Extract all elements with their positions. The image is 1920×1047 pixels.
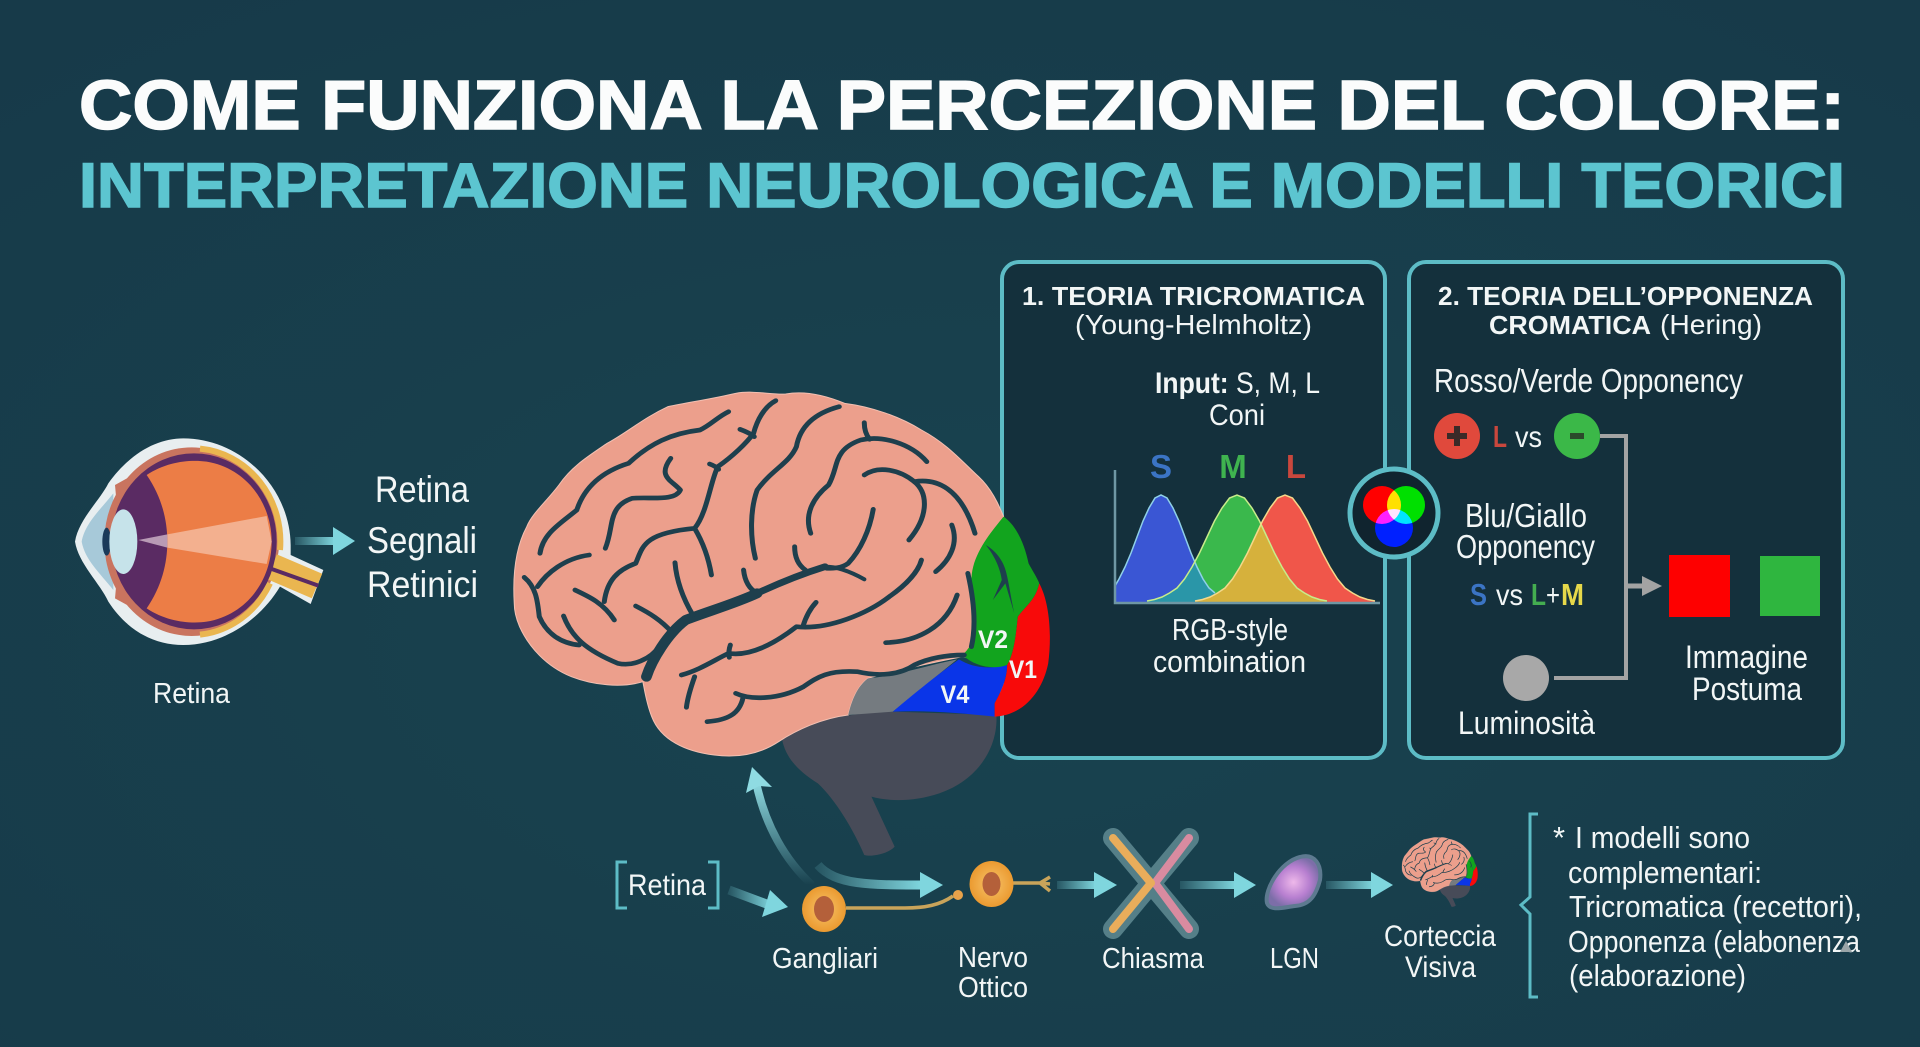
icon: optic nerve cell — [970, 861, 1050, 907]
RGB-style caption: RGB-style — [1172, 612, 1288, 647]
label V1: V1 — [1009, 656, 1037, 684]
S vs L+M: L — [1531, 577, 1546, 612]
RGB-style caption: combination — [1153, 644, 1306, 679]
panel heading: 1. TEORIA TRICROMATICA — [1022, 281, 1365, 311]
blu/giallo label — [1456, 497, 1595, 565]
label corteccia visiva: Corteccia — [1384, 920, 1496, 953]
blu/giallo label: Opponency — [1456, 528, 1595, 565]
S vs L+M: M — [1561, 577, 1584, 612]
label corteccia visiva: Visiva — [1405, 951, 1476, 984]
label M: M — [1219, 448, 1247, 485]
panel subtitle: (Young-Helmholtz) — [1075, 309, 1312, 340]
pathway labels — [772, 920, 1496, 1004]
green afterimage square — [1760, 556, 1820, 616]
panel: opponenza cromatica — [1409, 262, 1843, 758]
label LGN: LGN — [1270, 943, 1319, 975]
immagine postuma label — [1685, 639, 1808, 707]
rosso/verde label: Rosso/Verde Opponency — [1434, 362, 1743, 399]
panel heading line 2: (Hering) — [1660, 309, 1762, 340]
label nervo ottico — [958, 942, 1028, 1004]
panel frame — [1002, 262, 1385, 758]
arrow: curved to optic nerve — [818, 865, 943, 898]
RGB-style caption — [1153, 612, 1306, 679]
note text: * — [1553, 820, 1565, 855]
label V2: V2 — [978, 626, 1008, 654]
S vs L+M: + — [1546, 579, 1560, 612]
title line 1: COME FUNZIONA LA PERCEZIONE DEL COLORE: — [79, 66, 1845, 144]
panel heading: 2. TEORIA DELL’OPPONENZA — [1438, 281, 1813, 311]
note text: I modelli sono — [1575, 820, 1750, 855]
arrow: nerve to chiasma — [1057, 872, 1117, 898]
immagine postuma label: Immagine — [1685, 639, 1808, 675]
arrow: chiasma to LGN — [1180, 872, 1256, 898]
icon: RGB badge — [1350, 469, 1438, 557]
retinal signals label: Retinici — [367, 564, 478, 605]
S vs L+M: vs — [1496, 579, 1523, 612]
red afterimage square — [1669, 555, 1730, 617]
arrow to afterimage — [1626, 576, 1662, 596]
label corteccia visiva — [1384, 920, 1496, 984]
note text: (elaborazione) — [1569, 958, 1746, 993]
panel: teoria tricromatica — [1002, 262, 1385, 758]
icon: ganglion cell — [802, 886, 963, 932]
icon: LGN — [1267, 856, 1320, 908]
icon: mini brain — [1402, 837, 1478, 907]
label nervo ottico: Nervo — [958, 942, 1028, 974]
arrow: curved path to brain — [746, 767, 812, 885]
connector lines — [1554, 436, 1626, 678]
panel frame — [1409, 262, 1843, 758]
coni label: Coni — [1209, 399, 1265, 432]
arrow: LGN to cortex — [1326, 872, 1393, 898]
note text: complementari: — [1568, 855, 1762, 890]
blu/giallo label: Blu/Giallo — [1465, 497, 1587, 534]
L vs — [1493, 419, 1542, 454]
label V4: V4 — [940, 681, 970, 709]
L vs: L — [1493, 419, 1507, 454]
retinal signals label: Retina — [375, 469, 469, 510]
note text: Opponenza (elabonenza — [1568, 924, 1861, 959]
note bracket — [1521, 814, 1538, 997]
pathway: retina label: Retina — [628, 869, 706, 902]
S vs L+M — [1470, 577, 1584, 612]
title — [79, 66, 1845, 221]
label gangliari: Gangliari — [772, 943, 878, 975]
panel heading line 2 — [1489, 309, 1762, 340]
brain with visual areas — [514, 392, 1050, 856]
label chiasma: Chiasma — [1102, 943, 1205, 975]
immagine postuma label: Postuma — [1692, 671, 1802, 707]
L vs: vs — [1515, 421, 1542, 454]
note text: Tricromatica (recettori), — [1569, 889, 1862, 924]
S vs L+M: S — [1470, 577, 1487, 612]
luminosità label: Luminosità — [1458, 705, 1595, 741]
title line 2: INTERPRETAZIONE NEUROLOGICA E MODELLI TEORICI — [79, 151, 1845, 221]
label S: S — [1150, 448, 1172, 485]
arrow: retina to ganglion — [729, 890, 788, 917]
retina label under eye: Retina — [153, 678, 231, 710]
label nervo ottico: Ottico — [958, 972, 1028, 1004]
icon: luminance circle — [1503, 655, 1549, 701]
arrow: eye to signals — [295, 527, 355, 555]
input label: Input: S, M, L — [1155, 367, 1320, 400]
cone sensitivity chart — [1115, 470, 1380, 603]
icon: minus circle — [1554, 413, 1600, 459]
retinal signals label — [367, 469, 478, 605]
icon: optic chiasm — [1113, 838, 1189, 929]
label L: L — [1286, 448, 1306, 485]
note text — [1553, 820, 1862, 993]
retinal signals label: Segnali — [367, 520, 477, 561]
icon: plus circle — [1434, 413, 1480, 459]
panel heading line 2: CROMATICA — [1489, 310, 1651, 340]
eye diagram — [75, 438, 323, 645]
pathway: retina label — [617, 862, 718, 908]
